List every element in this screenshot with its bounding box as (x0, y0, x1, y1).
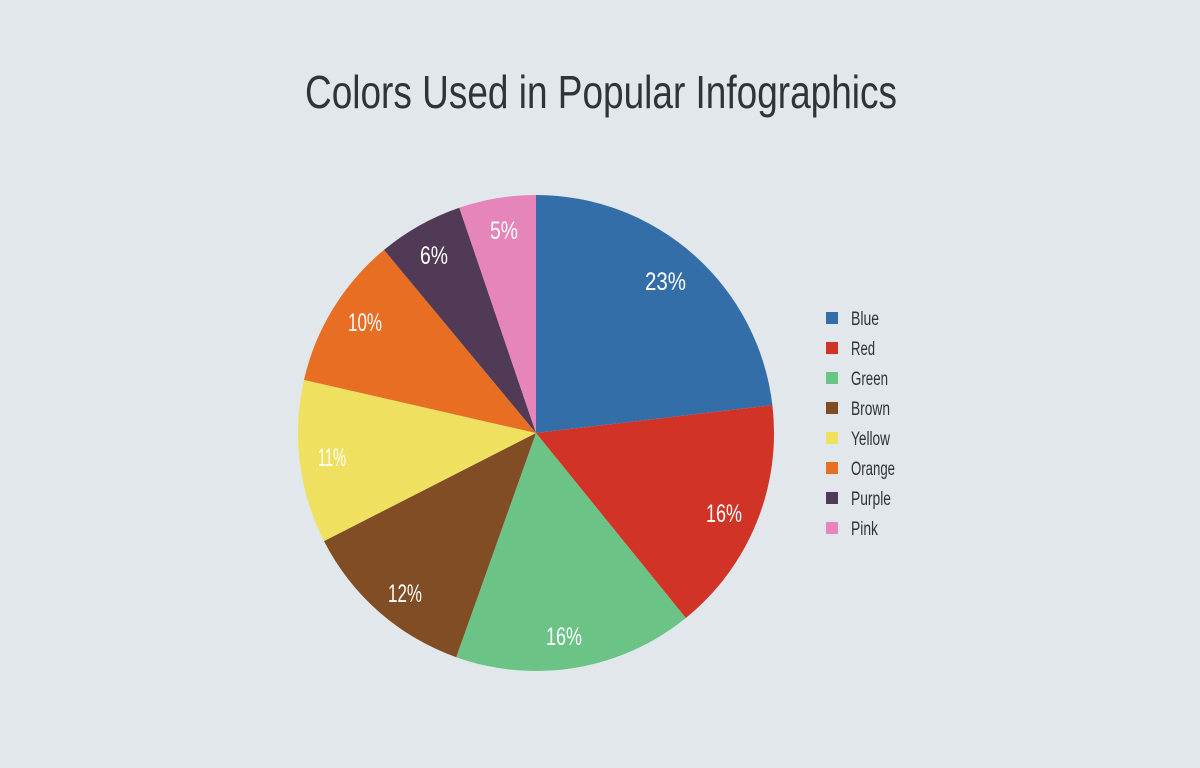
legend: Pink (851, 519, 878, 540)
legend (826, 309, 895, 540)
slice labels: 16% (706, 500, 742, 528)
title: Colors Used in Popular Infographics (305, 66, 897, 118)
slice labels: 10% (348, 309, 382, 337)
legend: Brown (851, 399, 890, 420)
slice labels: 6% (420, 242, 448, 270)
slice labels (318, 217, 742, 651)
legend: Red (851, 339, 875, 360)
legend: Yellow (851, 429, 890, 450)
slice labels: 23% (645, 268, 686, 296)
slice labels: 5% (490, 217, 518, 245)
pie chart (298, 195, 774, 671)
legend: Purple (851, 489, 891, 510)
legend: Orange (851, 459, 895, 480)
slice labels: 16% (546, 623, 582, 651)
slice labels: 11% (318, 444, 346, 472)
slice labels: 12% (388, 580, 422, 608)
legend: Blue (851, 309, 879, 330)
legend: Green (851, 369, 888, 390)
